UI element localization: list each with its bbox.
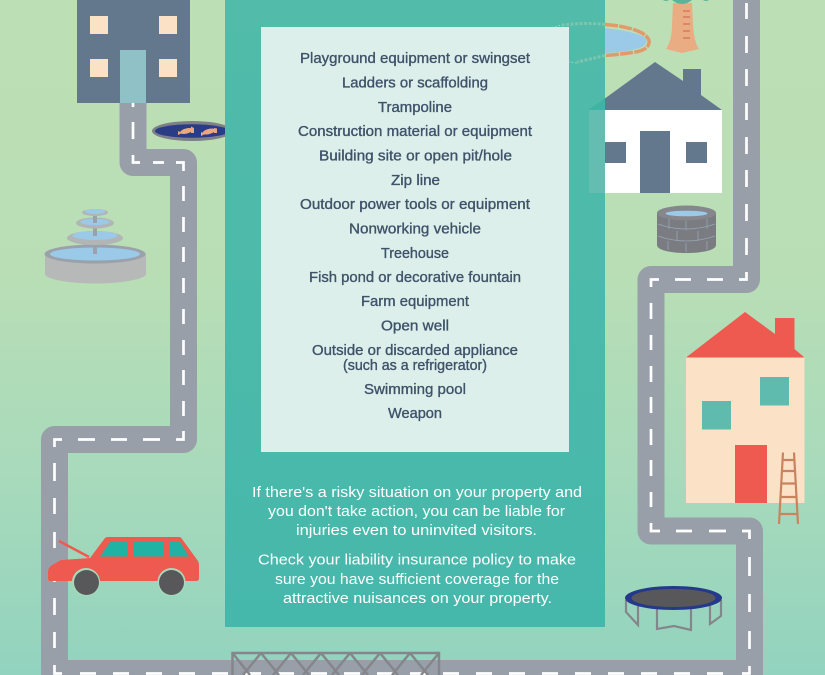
list items: Treehouse [381, 246, 449, 262]
list items: Swimming pool [364, 382, 466, 398]
icon: tiered fountain [44, 209, 146, 284]
icon: fish pond [152, 121, 232, 141]
list items: Open well [381, 318, 449, 334]
text block: liability warning [252, 485, 582, 539]
list items: Zip line [391, 173, 440, 189]
text block: liability warning: you don't take action, you can be liable for [268, 504, 565, 520]
list items: Outside or discarded appliance [312, 343, 518, 359]
icon: trampoline [625, 586, 722, 630]
icon: tree [663, 0, 709, 53]
list items [298, 51, 532, 422]
list items: (such as a refrigerator) [343, 358, 487, 374]
text block: insurance advice: Check your liability insurance policy to make [258, 552, 576, 568]
icon: open well [657, 206, 716, 253]
panel: list of attractive nuisances [261, 27, 569, 452]
house with red roof [686, 312, 804, 503]
list items: Construction material or equipment [298, 124, 532, 140]
white house with grey roof [589, 62, 722, 193]
list items: Playground equipment or swingset [300, 51, 530, 67]
list items: Nonworking vehicle [349, 222, 481, 238]
text block: insurance advice: sure you have sufficient coverage for the [275, 572, 559, 588]
text block: insurance advice [258, 552, 576, 607]
text block: liability warning: injuries even to uninvited visitors. [296, 523, 537, 539]
list items: Building site or open pit/hole [319, 148, 512, 164]
icon: truss bridge [232, 653, 439, 675]
text block: liability warning: If there's a risky situation on your property and [252, 485, 582, 501]
icon: swimming pool [531, 23, 649, 63]
apartment building [77, 0, 190, 103]
icon: ladder [779, 452, 798, 524]
list items: Ladders or scaffolding [342, 76, 488, 92]
list items: Outdoor power tools or equipment [300, 197, 530, 213]
list items: Fish pond or decorative fountain [309, 270, 521, 286]
list items: Trampoline [378, 100, 452, 116]
list items: Weapon [388, 406, 442, 422]
text block: insurance advice: attractive nuisances on your property. [283, 591, 552, 607]
panel: teal main panel [225, 0, 605, 627]
icon: red car with open hood [48, 537, 199, 596]
list items: Farm equipment [361, 294, 469, 310]
